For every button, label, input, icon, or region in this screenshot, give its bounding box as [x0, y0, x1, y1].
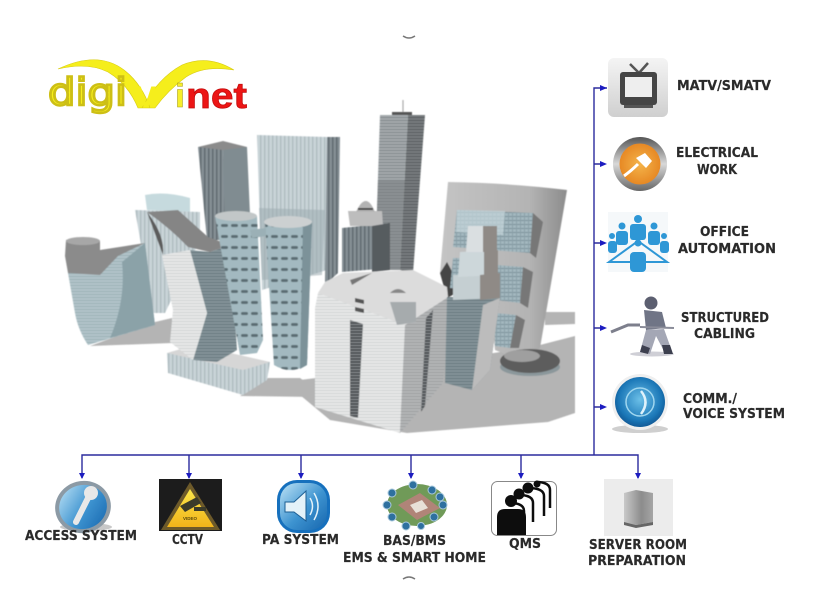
right column of services — [608, 58, 785, 433]
center wide building — [257, 135, 340, 290]
logo word net: net — [186, 75, 247, 116]
logo word digi: digi — [48, 71, 127, 114]
label: SERVER ROOM PREPARATION — [588, 538, 687, 569]
icon: electrical plug — [613, 137, 667, 191]
cropped letter fragment top — [403, 36, 415, 38]
icon: QMS queue of people — [492, 480, 556, 536]
left rounded building — [65, 237, 155, 345]
label: STRUCTURED CABLING: CABLING — [694, 327, 755, 342]
label: OFFICE AUTOMATION: AUTOMATION — [678, 242, 776, 257]
label: BAS/BMS EMS & SMART HOME — [343, 534, 486, 566]
icon: smart building map — [383, 481, 447, 530]
logo: digiVinet — [48, 60, 247, 116]
label: BAS/BMS EMS & SMART HOME: EMS & SMART HOME — [343, 551, 486, 566]
label: CCTV: CCTV — [172, 533, 203, 548]
icon: television — [608, 58, 668, 117]
sign caption: VIDEO — [183, 516, 197, 521]
label: COMM./ VOICE SYSTEM: COMM./ — [683, 392, 737, 407]
bottom row of services — [25, 475, 687, 569]
ground shadows — [90, 312, 575, 433]
icon: PA speaker — [277, 480, 330, 533]
label: OFFICE AUTOMATION — [678, 225, 776, 257]
connector lines and arrows — [79, 85, 641, 479]
icon: server unit — [604, 479, 673, 536]
icon: phone button — [612, 374, 668, 433]
label: ACCESS SYSTEM: ACCESS SYSTEM — [25, 529, 137, 544]
label: COMM./ VOICE SYSTEM — [683, 392, 785, 422]
logo letter i: i — [175, 77, 185, 114]
logo swoosh V — [58, 60, 234, 108]
label: SERVER ROOM PREPARATION: PREPARATION — [588, 554, 686, 569]
tall tower — [375, 100, 425, 273]
left back tower — [198, 141, 250, 240]
stepped tower — [445, 226, 500, 390]
icon: CCTV warning sign — [159, 479, 222, 531]
cropped letter fragment bottom — [403, 577, 415, 579]
cylinder towers — [215, 211, 312, 370]
city buildings illustration — [65, 100, 575, 433]
icon: office team — [608, 212, 669, 272]
label: OFFICE AUTOMATION: OFFICE — [700, 225, 749, 240]
icon: robot with cable — [611, 296, 674, 356]
front large building — [315, 270, 452, 433]
icon: access key — [49, 475, 117, 539]
label: COMM./ VOICE SYSTEM: VOICE SYSTEM — [683, 407, 785, 422]
label: ELECTRICAL WORK — [676, 146, 758, 178]
label: BAS/BMS EMS & SMART HOME: BAS/BMS — [383, 534, 446, 549]
label: MATV/SMATV: MATV/SMATV — [677, 79, 771, 94]
label: SERVER ROOM PREPARATION: SERVER ROOM — [589, 538, 687, 553]
label: STRUCTURED CABLING: STRUCTURED — [681, 311, 769, 326]
sail building with base — [147, 210, 270, 395]
curved back building — [440, 182, 567, 376]
light back building — [135, 194, 200, 313]
label: ELECTRICAL WORK: ELECTRICAL — [676, 146, 758, 161]
logo letter V label: V — [136, 81, 156, 114]
label: PA SYSTEM: PA SYSTEM — [262, 533, 339, 548]
label: STRUCTURED CABLING — [681, 311, 769, 342]
dome building — [342, 201, 390, 272]
label: QMS: QMS — [509, 537, 541, 552]
label: ELECTRICAL WORK: WORK — [697, 163, 738, 178]
